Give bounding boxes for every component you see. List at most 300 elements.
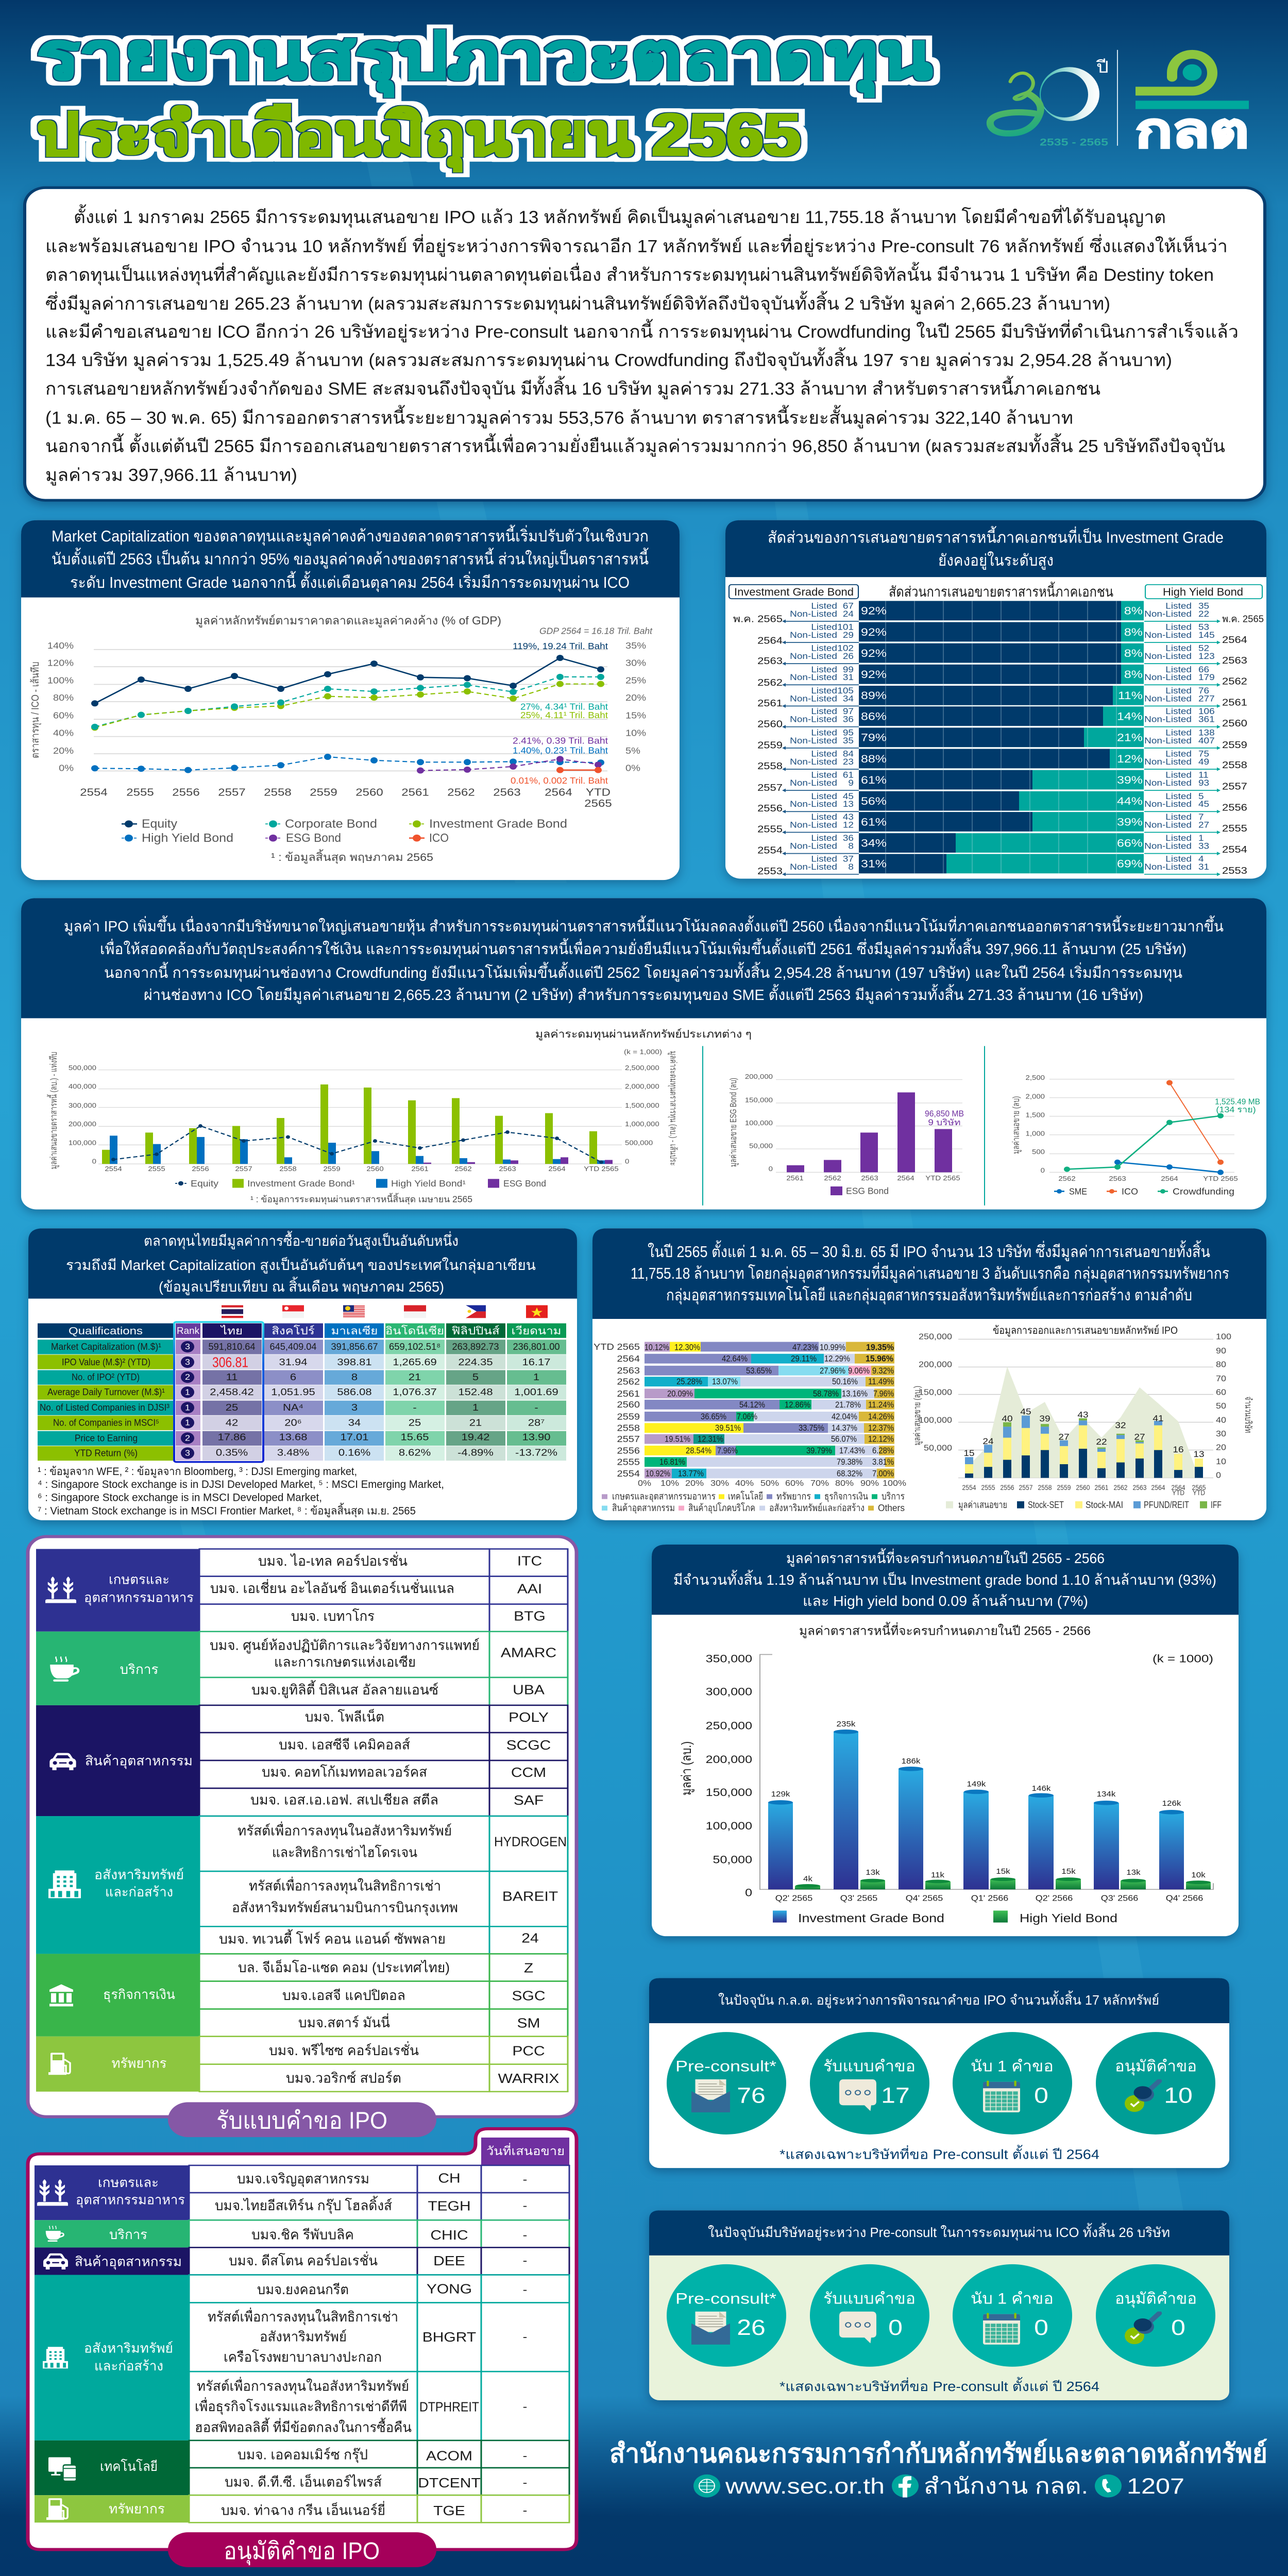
chart: maturing bonds: 250,000 bbox=[706, 1719, 752, 1732]
table: ASEAN comparison: 6 bbox=[290, 1372, 296, 1383]
table: ASEAN comparison: 8 bbox=[351, 1372, 358, 1383]
panel: fundraising by security type bbox=[21, 898, 1266, 1209]
table: ASEAN comparison: 25 bbox=[226, 1402, 238, 1413]
chart: equity and bond fundraising: 1,000,000 bbox=[625, 1120, 659, 1128]
table: ASEAN comparison: 42 bbox=[226, 1417, 238, 1428]
row group: industrials: CCM bbox=[511, 1765, 546, 1780]
chart: equity and bond fundraising: 2559 bbox=[323, 1165, 341, 1173]
stacked bars: private debt share: 34% bbox=[861, 837, 887, 849]
chart: SME, ICO, crowdfunding: ICO bbox=[1122, 1187, 1138, 1196]
legend: IPO by sector bbox=[602, 1490, 905, 1514]
labels: high yield counts: Non-Listed bbox=[1144, 736, 1192, 745]
icon: cup bbox=[46, 2226, 64, 2242]
table: ASEAN comparison: 2 bbox=[185, 1434, 190, 1443]
labels: investment grade counts: 45 bbox=[843, 791, 854, 801]
chart: SME, ICO, crowdfunding: 2,000 bbox=[1026, 1093, 1045, 1100]
table: ASEAN comparison: 17.86 bbox=[217, 1432, 246, 1443]
legend: IPO issuance: PFUND/REIT bbox=[1144, 1499, 1189, 1510]
chart: equity and bond fundraising: 300,000 bbox=[69, 1101, 96, 1109]
icon: car bbox=[43, 2253, 68, 2269]
legend: IPO issuance: IFF bbox=[1211, 1499, 1222, 1510]
labels: high yield counts: 407 bbox=[1198, 736, 1215, 745]
chart: equity and bond fundraising: 2557 bbox=[235, 1165, 252, 1173]
row group: agriculture: บมจ. ไอ-เทล คอร์ปอเรชั่น bbox=[258, 1551, 408, 1569]
icon: globe bbox=[693, 2475, 720, 2497]
labels: high yield counts: Non-Listed bbox=[1144, 609, 1192, 618]
legend: market capitalization: Investment Grade Bond bbox=[429, 817, 567, 831]
stacked bars: IPO by sector: 58.78% bbox=[813, 1389, 839, 1398]
table: ASEAN comparison: 2,458.42 bbox=[210, 1387, 254, 1398]
row group: services: บริการ bbox=[120, 1662, 159, 1677]
table: ASEAN comparison: มาเลเซีย bbox=[331, 1325, 378, 1337]
chart: equity and bond fundraising: 200,000 bbox=[69, 1120, 96, 1128]
labels: investment grade counts: Non-Listed bbox=[790, 673, 837, 682]
labels: high yield counts: Listed bbox=[1165, 770, 1192, 779]
row group: agriculture bbox=[35, 2165, 569, 2220]
footer: organisation and contacts: สำนักงาน กลต. bbox=[924, 2473, 1088, 2498]
stacked bars: IPO by sector: 30% bbox=[710, 1479, 729, 1488]
stacked bars: private debt share: 86% bbox=[861, 710, 887, 722]
legend box: investment grade bond: Investment Grade Bond bbox=[734, 585, 854, 598]
labels: investment grade counts: 61 bbox=[843, 770, 854, 779]
chart: ESG bond: 2562 bbox=[824, 1174, 841, 1182]
chart: SME, ICO, crowdfunding: 1,525.49 MB bbox=[1215, 1097, 1260, 1106]
labels: investment grade counts: 2554 bbox=[757, 845, 783, 856]
stacked bars: private debt share: 92% bbox=[861, 604, 887, 617]
row group: agriculture: บมจ. เบทาโกร bbox=[291, 1608, 375, 1624]
circle: approved bbox=[1096, 2264, 1215, 2367]
table: ASEAN comparison: No. of Companies in MSCI⁵ bbox=[53, 1417, 159, 1428]
row group: industrials: บมจ. คอทโก้เมททอลเวอร์คส bbox=[262, 1764, 427, 1780]
stacked bars: IPO by sector: 3.81% bbox=[872, 1457, 894, 1467]
labels: investment grade counts: 97 bbox=[843, 706, 854, 716]
chart: equity and bond fundraising bbox=[47, 1048, 679, 1205]
labels: investment grade counts: 8 bbox=[848, 862, 854, 872]
labels: investment grade counts: 13 bbox=[843, 799, 854, 809]
row group: property: บมจ. ทเวนตี้ โฟร์ คอน แอนด์ ซัพพลาย bbox=[219, 1929, 446, 1947]
stacked bars: IPO by sector: 12.12% bbox=[868, 1434, 894, 1444]
stacked bars: IPO by sector: 2556 bbox=[617, 1446, 640, 1455]
circle: filing received bbox=[810, 2264, 929, 2367]
table: ASEAN comparison: 1,265.69 bbox=[393, 1357, 437, 1368]
chart: SME, ICO, crowdfunding: 1,500 bbox=[1026, 1111, 1045, 1118]
row group: property: ฮอสพิทอลลิตี้ ที่มีข้อตกลงในการซื้อคืน bbox=[195, 2417, 412, 2435]
line chart: % of GDP: ตราสารทุน / ICO - เส้นทึบ bbox=[29, 662, 42, 758]
row group: property: ทรัสต์เพื่อการลงทุนในสิทธิการเช่า bbox=[208, 2307, 398, 2325]
chart: IPO issuance: 41 bbox=[1153, 1414, 1164, 1423]
footnotes: ASEAN comparison: ¹ : ข้อมูลจาก WFE, ² : ข้อมูลจาก Bloomberg, ³ : DJSI Emerging market, bbox=[38, 1465, 357, 1478]
labels: high yield counts: Listed bbox=[1165, 706, 1192, 716]
chart: SME, ICO, crowdfunding: 0 bbox=[1041, 1166, 1045, 1174]
labels: investment grade counts: Non-Listed bbox=[790, 651, 837, 661]
labels: investment grade counts: 43 bbox=[843, 812, 854, 822]
circle: day one: นับ 1 คำขอ bbox=[971, 2290, 1054, 2307]
labels: high yield counts: Non-Listed bbox=[1144, 630, 1192, 640]
chart: IPO issuance: 24 bbox=[982, 1436, 994, 1446]
labels: high yield counts: 27 bbox=[1198, 820, 1209, 829]
circle: filing received: รับแบบคำขอ bbox=[823, 2057, 916, 2075]
chart: ESG bond: YTD 2565 bbox=[925, 1174, 960, 1182]
chart: IPO issuance: 2564 bbox=[1171, 1484, 1185, 1492]
chart: maturing bonds: 50,000 bbox=[713, 1853, 752, 1866]
stacked bars: IPO by sector: 19.51% bbox=[665, 1434, 690, 1444]
chart: IPO issuance: มูลค่าเสนอขาย (ลบ.) bbox=[912, 1386, 923, 1446]
stacked bars: private debt share: 12% bbox=[1117, 752, 1143, 765]
line chart: % of GDP: 119%, 19.24 Tril. Baht bbox=[513, 641, 608, 652]
stacked bars: IPO by sector: 2563 bbox=[617, 1366, 640, 1376]
stacked bars: IPO by sector: 2554 bbox=[617, 1468, 640, 1479]
chart: equity and bond fundraising: 2561 bbox=[411, 1165, 429, 1173]
table: ASEAN comparison: Market Capitalization (M.$)¹ bbox=[51, 1341, 161, 1352]
labels: high yield counts: Listed bbox=[1165, 622, 1192, 632]
header: ICO pipeline: ในปัจจุบันมีบริษัทอยู่ระหว่าง Pre-consult ในการระดมทุนผ่าน ICO ทั้งสิ้น 26 บริษัท bbox=[708, 2223, 1170, 2241]
row group: property: ทรัสต์เพื่อการลงทุนในสิทธิการเช่า bbox=[249, 1876, 441, 1894]
labels: high yield counts: Listed bbox=[1165, 643, 1192, 653]
header: ASEAN comparison bbox=[28, 1228, 577, 1299]
header: IPO pipeline bbox=[649, 1978, 1229, 2023]
line chart: % of GDP: 2556 bbox=[172, 786, 200, 798]
labels: high yield counts: 22 bbox=[1198, 609, 1209, 618]
row group: services: CHIC bbox=[430, 2228, 468, 2243]
circle: day one: 0 bbox=[1034, 2315, 1048, 2340]
stacked bars: private debt share: 44% bbox=[1117, 795, 1143, 807]
row group: industrials: บมจ. โพลีเน็ต bbox=[305, 1708, 384, 1725]
panel: IPO filings received bbox=[28, 1537, 577, 2117]
labels: investment grade counts: 2556 bbox=[757, 803, 783, 814]
chart: maturing bonds: 350,000 bbox=[706, 1652, 752, 1665]
chart: IPO issuance: 250,000 bbox=[919, 1332, 952, 1341]
chart: equity and bond fundraising: 2555 bbox=[148, 1165, 165, 1173]
row group: property: และก่อสร้าง bbox=[105, 1885, 173, 1900]
stacked bars: IPO by sector: 14.37% bbox=[832, 1423, 857, 1433]
labels: investment grade counts: Non-Listed bbox=[790, 841, 837, 851]
row group: finance bbox=[36, 1954, 568, 2037]
labels: high yield counts: 2558 bbox=[1222, 760, 1247, 771]
chart: IPO issuance: YTD bbox=[1193, 1489, 1205, 1497]
circle: filing received bbox=[810, 2032, 929, 2134]
line chart: % of GDP: 10% bbox=[625, 728, 646, 738]
legend: market capitalization: ICO bbox=[429, 832, 449, 845]
labels: high yield counts: 1 bbox=[1198, 833, 1204, 843]
labels: investment grade counts: 101 bbox=[837, 622, 854, 632]
line chart: % of GDP: 80% bbox=[53, 692, 74, 703]
stacked bars: private debt share: 92% bbox=[861, 625, 887, 638]
line chart: % of GDP: 2558 bbox=[264, 786, 292, 798]
line chart: % of GDP: 2.41%, 0.39 Tril. Baht bbox=[513, 736, 608, 746]
panel: market capitalization bbox=[21, 520, 680, 880]
chart: maturing bonds: 11k bbox=[931, 1871, 944, 1879]
stacked bars: IPO by sector: 11.24% bbox=[868, 1400, 894, 1409]
icon: car bbox=[49, 1753, 76, 1770]
line chart: % of GDP: 0% bbox=[59, 763, 74, 773]
circle: approved: อนุมัติคำขอ bbox=[1115, 2290, 1197, 2308]
header: maturing bonds: และ High yield bond 0.09 ล้านล้านบาท (7%) bbox=[803, 1594, 1088, 1609]
row group: resources: ทรัพยากร bbox=[109, 2501, 165, 2516]
chart: SME, ICO, crowdfunding: Crowdfunding bbox=[1173, 1187, 1234, 1196]
stacked bars: IPO by sector: 20% bbox=[685, 1479, 704, 1488]
labels: investment grade counts: Listed bbox=[811, 601, 837, 611]
labels: high yield counts: 2560 bbox=[1222, 718, 1247, 728]
row group: property: YONG bbox=[427, 2282, 472, 2296]
stacked bars: IPO by sector: 70% bbox=[810, 1479, 829, 1488]
row group: technology: DTCENT bbox=[418, 2476, 481, 2490]
chart: maturing bonds: 200,000 bbox=[706, 1753, 752, 1765]
table: ASEAN comparison: 3 bbox=[185, 1358, 190, 1367]
labels: high yield counts: 11 bbox=[1198, 770, 1209, 779]
legend: market capitalization bbox=[122, 817, 567, 845]
table: ASEAN comparison: 152.48 bbox=[458, 1387, 493, 1398]
panel: summary text: การเสนอขายหลักทรัพย์วงจำกัดของ SME สะสมจนถึงปัจจุบัน มีทั้งสิ้น 16 บริษัท มูลค่ารวม 271.33 ล้านบาท สำหรับตราสารหนี้ภาคเอกชน bbox=[45, 376, 1100, 399]
line chart: % of GDP: 2560 bbox=[355, 786, 383, 798]
stacked bars: IPO by sector: 20.09% bbox=[667, 1389, 693, 1398]
table: ASEAN comparison: 1 bbox=[185, 1403, 190, 1412]
chart title: fundraising by type: มูลค่าระดมทุนผ่านหลักทรัพย์ประเภทต่าง ๆ bbox=[535, 1028, 752, 1041]
circle: approved: อนุมัติคำขอ bbox=[1115, 2057, 1197, 2076]
line chart: % of GDP: 120% bbox=[47, 658, 74, 668]
row group: property bbox=[35, 2275, 569, 2441]
row group: industrials: SAF bbox=[514, 1793, 544, 1807]
panel: summary text: ซึ่งมีมูลค่าการเสนอขาย 265.23 ล้านบาท (ผลรวมสะสมการระดมทุนผ่านสินทรัพย์ดิจิทัลถึงปัจจุบันทั้งสิ้น 2 บริษัท มูลค่า 2,665.23 ล้านบาท) bbox=[45, 291, 1110, 314]
stacked bars: IPO by sector: 60% bbox=[785, 1479, 804, 1488]
row group: finance: SGC bbox=[512, 1989, 545, 2003]
chart: maturing bonds: 300,000 bbox=[706, 1685, 752, 1698]
row group: industrials: DEE bbox=[433, 2253, 465, 2268]
legend: equity and bond fundraising: High Yield Bond¹ bbox=[391, 1178, 466, 1189]
stacked bars: IPO by sector: 21.78% bbox=[835, 1400, 861, 1409]
logo: 30 years bbox=[990, 58, 1109, 148]
row group: services: AMARC bbox=[501, 1646, 556, 1660]
labels: high yield counts: 2562 bbox=[1222, 676, 1247, 687]
labels: high yield counts: Non-Listed bbox=[1144, 673, 1192, 682]
header: maturing bonds: มูลค่าตราสารหนี้ที่จะครบกำหนดภายในปี 2565 - 2566 bbox=[786, 1548, 1105, 1567]
row group: agriculture: อุตสาหกรรมอาหาร bbox=[76, 2193, 185, 2208]
circle: pre-consult: 76 bbox=[737, 2083, 766, 2108]
logo: SEC: กลต bbox=[1136, 104, 1249, 157]
labels: investment grade counts: 36 bbox=[843, 833, 854, 843]
legend: equity and bond fundraising: Equity bbox=[191, 1178, 219, 1189]
stacked bars: private debt share: 39% bbox=[1117, 774, 1143, 786]
labels: investment grade counts: 102 bbox=[837, 643, 854, 653]
row group: agriculture: บมจ.ไทยอีสเทิร์น กรุ๊ป โฮลดิ้งส์ bbox=[215, 2196, 392, 2214]
table: ASEAN comparison: Rank bbox=[177, 1326, 200, 1336]
row group: agriculture: - bbox=[523, 2173, 527, 2186]
table: ASEAN comparison: -4.89% bbox=[457, 1447, 494, 1458]
icon: phone bbox=[1095, 2475, 1122, 2497]
labels: high yield counts: 106 bbox=[1198, 706, 1215, 716]
labels: investment grade counts: 37 bbox=[843, 854, 854, 863]
labels: high yield counts: 7 bbox=[1198, 812, 1204, 822]
legend: IPO by sector: อสังหาริมทรัพย์และก่อสร้าง bbox=[769, 1502, 865, 1513]
table: ASEAN comparison: 13.68 bbox=[279, 1432, 308, 1443]
logo: 30 years: 2535 - 2565 bbox=[1040, 137, 1108, 148]
chart: SME, ICO, crowdfunding: (134 ราย) bbox=[1216, 1105, 1256, 1114]
labels: investment grade counts: Listed bbox=[811, 854, 837, 863]
chart: ESG bond: 200,000 bbox=[745, 1073, 773, 1080]
labels: investment grade counts: พ.ค. 2565 bbox=[733, 614, 783, 624]
line chart: % of GDP: 25% bbox=[625, 675, 646, 685]
legend: maturing bonds: Investment Grade Bond bbox=[798, 1912, 944, 1925]
panel: IPO pipeline bbox=[649, 1978, 1229, 2168]
row group: property: และก่อสร้าง bbox=[94, 2359, 163, 2373]
icon: building bbox=[43, 2347, 68, 2368]
row group: property: เครือโรงพยาบาลบางปะกอก bbox=[224, 2349, 382, 2365]
labels: investment grade counts: Listed bbox=[811, 791, 837, 801]
labels: investment grade counts: Listed bbox=[811, 833, 837, 843]
chart: equity and bond fundraising: 2556 bbox=[192, 1165, 209, 1173]
chart: ESG bond: ESG Bond bbox=[846, 1186, 889, 1196]
table: ASEAN comparison: No. of Listed Companies in DJSI³ bbox=[40, 1402, 170, 1413]
chart: IPO issuance: 27 bbox=[1134, 1432, 1145, 1442]
labels: high yield counts: Listed bbox=[1165, 601, 1192, 611]
stacked bars: IPO by sector: 10.92% bbox=[646, 1469, 670, 1478]
footnotes: ASEAN comparison: ⁷ : Vietnam Stock exchange is in MSCI Frontier Market, ⁸ : ข้อมูลสิ้นสุด เม.ย. 2565 bbox=[38, 1502, 416, 1518]
table: ASEAN comparison: 591,810.64 bbox=[208, 1341, 256, 1352]
row group: agriculture: - bbox=[523, 2199, 527, 2212]
stacked bars: private debt share: 92% bbox=[861, 647, 887, 659]
stacked bars: IPO by sector: 15.96% bbox=[866, 1354, 893, 1363]
labels: investment grade counts: 24 bbox=[843, 609, 854, 618]
chart: maturing bonds: 150,000 bbox=[706, 1786, 752, 1799]
stacked bars: IPO by sector: 14.26% bbox=[868, 1412, 894, 1421]
row group: resources bbox=[36, 2037, 568, 2092]
labels: high yield counts: Listed bbox=[1165, 833, 1192, 843]
header: ASEAN comparison: รวมถึงมี Market Capitalization สูงเป็นอันดับต้นๆ ของประเทศในกลุ่มอาเซียน bbox=[66, 1257, 536, 1274]
labels: investment grade counts: Listed bbox=[811, 643, 837, 653]
chart: equity and bond fundraising: 2560 bbox=[366, 1165, 384, 1173]
table: ASEAN comparison: 1 bbox=[185, 1388, 190, 1397]
labels: investment grade counts: Non-Listed bbox=[790, 694, 837, 703]
row group: agriculture: ITC bbox=[517, 1553, 542, 1568]
row group: resources: PCC bbox=[512, 2044, 545, 2058]
header: ASEAN comparison: (ข้อมูลเปรียบเทียบ ณ สิ้นเดือน พฤษภาคม 2565) bbox=[159, 1277, 444, 1295]
chart: ESG bond: 0 bbox=[769, 1165, 773, 1173]
labels: high yield counts: Listed bbox=[1165, 854, 1192, 863]
stacked bars: private debt share: 39% bbox=[1117, 816, 1143, 828]
legend: IPO by sector: สินค้าอุตสาหกรรม bbox=[612, 1502, 675, 1514]
labels: high yield counts: Non-Listed bbox=[1144, 862, 1192, 872]
chart: ESG bond: 2564 bbox=[897, 1174, 914, 1182]
labels: investment grade counts: 35 bbox=[843, 736, 854, 745]
stacked bars: private debt share: 92% bbox=[861, 668, 887, 681]
chart: IPO issuance: 40 bbox=[1002, 1414, 1013, 1423]
chart: IPO issuance: 60 bbox=[1216, 1388, 1226, 1397]
labels: high yield counts: 2561 bbox=[1222, 697, 1247, 708]
row group: finance: บมจ.เอสจี แคปปิตอล bbox=[282, 1988, 405, 2004]
stacked bars: private debt share: 21% bbox=[1117, 731, 1143, 743]
row group: resources bbox=[35, 2495, 569, 2522]
table: ASEAN comparison: IPO Value (M.$)² (YTD) bbox=[62, 1357, 150, 1368]
labels: investment grade counts: 31 bbox=[843, 673, 854, 682]
chart: equity and bond fundraising: 0 bbox=[625, 1158, 630, 1165]
chart: IPO issuance: 13 bbox=[1193, 1449, 1205, 1459]
chart: IPO issuance: 0 bbox=[1216, 1471, 1221, 1480]
labels: investment grade counts: 2553 bbox=[757, 866, 783, 877]
chart: IPO issuance: YTD bbox=[1172, 1489, 1184, 1497]
table: ASEAN comparison: 16.17 bbox=[522, 1357, 551, 1368]
table: ASEAN comparison: เวียดนาม bbox=[511, 1325, 562, 1337]
labels: investment grade counts: 2562 bbox=[757, 677, 783, 688]
line chart: % of GDP: ¹ : ข้อมูลสิ้นสุด พฤษภาคม 2565 bbox=[271, 849, 433, 864]
table: ASEAN comparison: NA⁴ bbox=[283, 1402, 303, 1413]
table: ASEAN comparison: 586.08 bbox=[337, 1387, 372, 1398]
line chart: % of GDP bbox=[29, 614, 653, 864]
stacked bars: IPO by sector: 10% bbox=[660, 1479, 679, 1488]
row group: property: - bbox=[523, 2400, 527, 2413]
labels: high yield counts: Listed bbox=[1165, 686, 1192, 696]
circle: pre-consult: Pre-consult* bbox=[675, 2290, 776, 2307]
header: market capitalization: Market Capitalization ของตลาดทุนและมูลค่าคงค้างของตลาดตราสารหนี้เริ่มปรับตัวในเชิงบวก bbox=[52, 524, 649, 546]
labels: investment grade counts: Listed bbox=[811, 686, 837, 696]
row group: property: อสังหาริมทรัพย์ bbox=[84, 2341, 173, 2355]
labels: investment grade counts: 99 bbox=[843, 665, 854, 674]
labels: investment grade counts bbox=[733, 601, 859, 877]
chart: IPO issuance: 200,000 bbox=[919, 1360, 952, 1369]
stacked bars: IPO by sector: 2558 bbox=[617, 1423, 640, 1433]
chart: IPO issuance: 2557 bbox=[1019, 1484, 1033, 1492]
chart: equity and bond fundraising: 2554 bbox=[105, 1165, 122, 1173]
circle: day one: นับ 1 คำขอ bbox=[971, 2057, 1054, 2075]
chart: IPO issuance: 50 bbox=[1216, 1401, 1226, 1411]
chart: IPO issuance: 2554 bbox=[962, 1484, 976, 1492]
pill: approved bbox=[168, 2532, 436, 2567]
circle: filing received: 17 bbox=[881, 2083, 910, 2108]
header: market capitalization bbox=[21, 520, 680, 598]
stacked bars: IPO by sector: 79.38% bbox=[837, 1457, 862, 1467]
stacked bars: IPO by sector: 90% bbox=[860, 1479, 879, 1488]
row group: agriculture: TEGH bbox=[428, 2199, 471, 2213]
table: ASEAN comparison: 645,409.04 bbox=[270, 1341, 317, 1352]
chart title: private debt share: สัดส่วนการเสนอขายตราสารหนี้ภาคเอกชน bbox=[889, 582, 1113, 600]
circle: pre-consult: Pre-consult* bbox=[675, 2057, 776, 2075]
stacked bars: IPO by sector: 40% bbox=[735, 1479, 754, 1488]
chart: maturing bonds: 126k bbox=[1162, 1800, 1181, 1808]
table: ASEAN comparison: 21 bbox=[469, 1417, 482, 1428]
stacked bars: private debt share: 8% bbox=[1124, 625, 1143, 638]
circle: approved bbox=[1096, 2032, 1215, 2134]
chart: equity and bond fundraising: 100,000 bbox=[69, 1139, 96, 1146]
table: ASEAN comparison: 28⁷ bbox=[528, 1417, 545, 1428]
chart: IPO issuance bbox=[912, 1325, 1253, 1511]
stacked bars: IPO by sector: 9.06% bbox=[848, 1366, 870, 1375]
chart: IPO issuance: 2556 bbox=[1001, 1484, 1014, 1492]
labels: high yield counts: 123 bbox=[1198, 651, 1215, 661]
header: maturing bonds bbox=[652, 1545, 1239, 1615]
chart: SME, ICO, crowdfunding bbox=[1011, 1074, 1260, 1196]
labels: high yield counts: 361 bbox=[1198, 715, 1215, 724]
labels: investment grade counts: Non-Listed bbox=[790, 609, 837, 618]
labels: high yield counts: 2559 bbox=[1222, 739, 1247, 750]
logo: 30 years: ปี bbox=[1096, 58, 1109, 76]
chart: SME, ICO, crowdfunding: 500 bbox=[1032, 1148, 1045, 1156]
chart: IPO issuance: 50,000 bbox=[924, 1444, 952, 1452]
table: ASEAN comparison: - bbox=[534, 1402, 538, 1413]
legend: IPO by sector: Others bbox=[878, 1502, 905, 1513]
row group: services bbox=[36, 1632, 568, 1705]
labels: high yield counts: 53 bbox=[1198, 622, 1209, 632]
chart: equity and bond fundraising: มูลค่าระดมทุนตราสารทุน (ลบ.) - เส้นประ bbox=[668, 1051, 679, 1166]
panel: ASEAN comparison bbox=[28, 1228, 577, 1520]
labels: investment grade counts: 26 bbox=[843, 651, 854, 661]
line chart: % of GDP: 2559 bbox=[310, 786, 337, 798]
row group: agriculture: AAI bbox=[517, 1581, 542, 1596]
header: ASEAN comparison: ตลาดทุนไทยมีมูลค่าการซื้อ-ขายต่อวันสูงเป็นอันดับหนึ่ง bbox=[144, 1230, 459, 1249]
chart: maturing bonds: 0 bbox=[745, 1886, 752, 1899]
legend: IPO by sector: สินค้าอุปโภคบริโภค bbox=[688, 1502, 755, 1514]
labels: investment grade counts: Listed bbox=[811, 665, 837, 674]
row group: services: บมจ.ยูทิลิตี้ บิสิเนส อัลลายแอนซ์ bbox=[251, 1680, 438, 1698]
labels: high yield counts: Non-Listed bbox=[1144, 715, 1192, 724]
labels: high yield counts: 35 bbox=[1198, 601, 1209, 611]
